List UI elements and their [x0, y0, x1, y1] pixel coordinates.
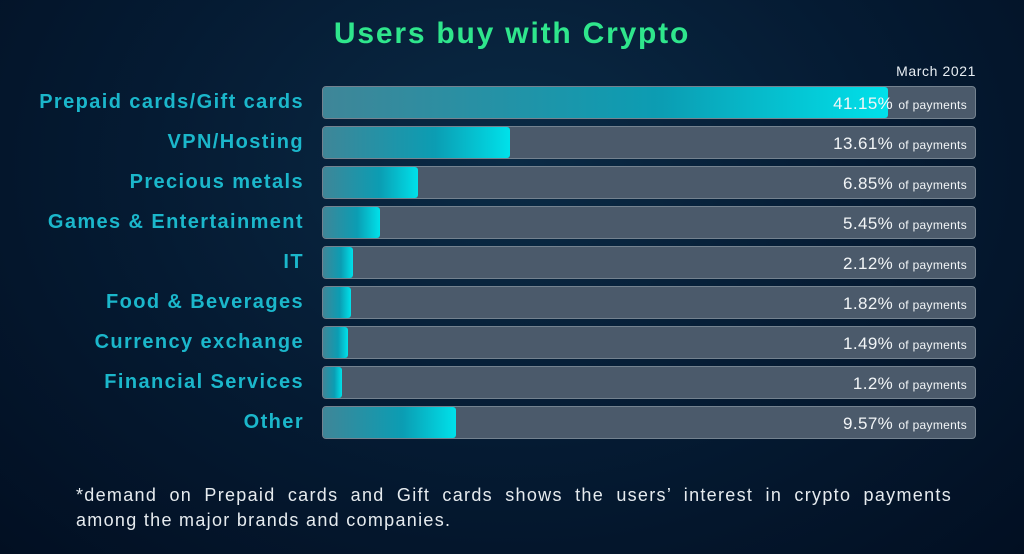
footnote: among the major brands and companies. [76, 510, 451, 530]
row: Currency: Currency exchange [95, 331, 304, 353]
row: Games [48, 206, 976, 239]
row: IT [283, 246, 976, 279]
row: Food [106, 286, 976, 319]
row: Financial: Financial Services [104, 371, 304, 393]
row: Financial [104, 366, 976, 399]
bar chart [39, 86, 976, 439]
footnote: *demand on Prepaid cards and Gift cards shows the users’ interest in crypto payments [76, 485, 952, 505]
row: Precious metals: Precious metals [130, 171, 304, 193]
row: Financial: 1.2% of payments [853, 374, 967, 393]
row: IT: 2.12% of payments [843, 254, 967, 273]
row: Prepaid cards: 41.15% of payments [833, 94, 967, 113]
footnote [76, 485, 952, 530]
title: Users buy with Crypto [334, 17, 690, 50]
row: Prepaid cards [39, 86, 976, 119]
row: Food: 1.82% of payments [843, 294, 967, 313]
row: Currency: 1.49% of payments [843, 334, 967, 353]
row: Precious metals: 6.85% of payments [843, 174, 967, 193]
row: Other: 9.57% of payments [843, 414, 967, 433]
row: VPN: VPN/Hosting [167, 131, 304, 153]
row: Other: Other [244, 411, 304, 433]
row: Other [244, 406, 976, 439]
row: VPN: 13.61% of payments [833, 134, 967, 153]
row: Games: Games & Entertainment [48, 211, 304, 233]
row: Games: 5.45% of payments [843, 214, 967, 233]
row: Food: Food & Beverages [106, 291, 304, 313]
row: Prepaid cards: Prepaid cards/Gift cards [39, 91, 304, 113]
row: VPN [167, 126, 976, 159]
row: IT: IT [283, 251, 304, 273]
row: Currency [95, 326, 976, 359]
date label: March 2021 [896, 63, 976, 79]
row: Precious metals [130, 166, 976, 199]
